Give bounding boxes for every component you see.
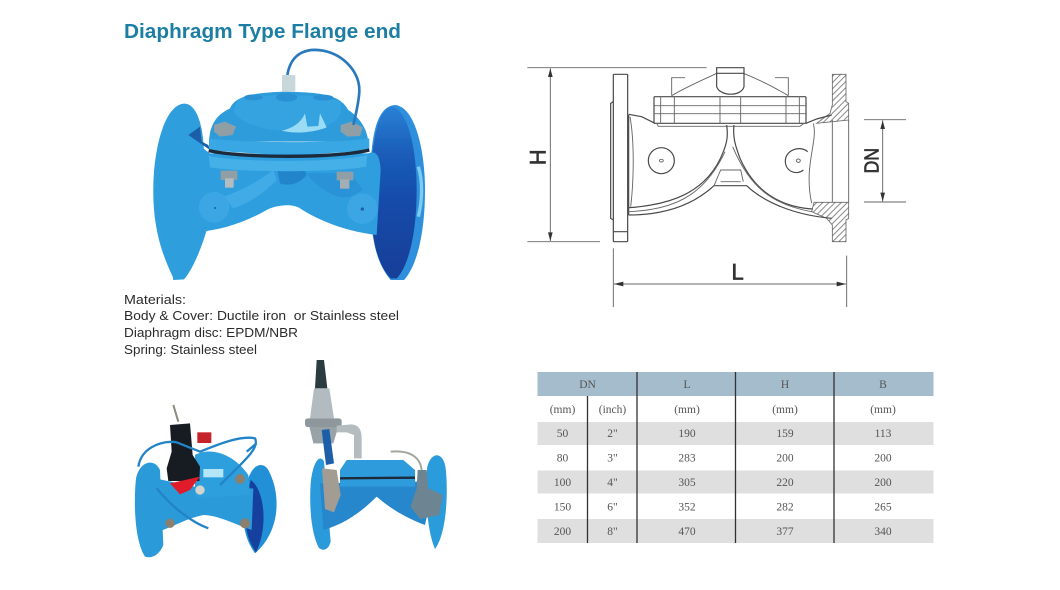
units row (550, 404, 896, 416)
left flange (153, 104, 207, 280)
row DN 80: 200 (874, 452, 892, 464)
table column rules (588, 372, 834, 543)
title: Diaphragm Type Flange end (124, 20, 401, 43)
dimension H: H (525, 149, 550, 165)
row DN 100 (554, 477, 892, 489)
right flange (370, 105, 425, 280)
materials text: Spring: Stainless steel (124, 343, 257, 357)
row DN 50: 190 (678, 428, 696, 440)
row DN 80 (557, 452, 892, 464)
body outline (629, 114, 832, 218)
row DN 80: 80 (557, 452, 568, 464)
bonnet (654, 68, 806, 126)
left flange (611, 74, 629, 242)
dimension L: L (732, 260, 744, 285)
dimension L (613, 248, 847, 307)
table header text: B (879, 379, 887, 391)
units row: (mm) (772, 404, 798, 416)
table header text (579, 379, 887, 391)
row DN 200: 377 (776, 526, 794, 538)
row DN 150: 150 (554, 502, 571, 514)
tube fitting (282, 75, 295, 92)
materials text (124, 293, 399, 357)
row DN 50 (557, 428, 892, 440)
plugs (199, 192, 378, 224)
row DN 200: 340 (874, 526, 892, 538)
table row stripes (538, 422, 934, 543)
materials text: Diaphragm disc: EPDM/NBR (124, 326, 298, 340)
plugs (648, 148, 808, 174)
row DN 50: 159 (776, 428, 794, 440)
row DN 80: 200 (776, 452, 794, 464)
row DN 80: 283 (678, 452, 696, 464)
row DN 150: 352 (678, 502, 696, 514)
dimension DN (861, 120, 906, 202)
table header band (538, 372, 934, 396)
row DN 150: 265 (874, 502, 892, 514)
materials text: Materials: (124, 293, 186, 307)
row DN 200: 470 (678, 526, 696, 538)
valve with black pilot (135, 405, 277, 557)
units row: (mm) (550, 404, 575, 416)
bonnet flange, gasket and lower plate (209, 138, 369, 171)
row DN 100: 4" (607, 477, 618, 489)
row DN 200: 200 (554, 526, 571, 538)
table header text: H (781, 379, 789, 391)
units row: (mm) (674, 404, 700, 416)
bolts (214, 122, 363, 189)
row DN 150: 282 (776, 502, 794, 514)
row DN 150 (554, 502, 892, 514)
row DN 150: 6" (607, 502, 618, 514)
row DN 50: 113 (875, 428, 892, 440)
row DN 50: 2" (607, 428, 618, 440)
dimension H (525, 68, 707, 242)
bonnet dome (209, 92, 368, 142)
sensing tube (287, 50, 359, 125)
dimensions table (538, 372, 934, 543)
row DN 80: 3" (607, 452, 618, 464)
row DN 100: 100 (554, 477, 571, 489)
row DN 200 (554, 526, 892, 538)
row DN 100: 305 (678, 477, 696, 489)
units row: (mm) (870, 404, 896, 416)
right flange section (812, 74, 849, 242)
row DN 50: 50 (557, 428, 568, 440)
valve body (187, 135, 381, 235)
technical drawing (525, 68, 906, 307)
row DN 200: 8" (607, 526, 618, 538)
table header text: L (683, 379, 691, 391)
units row: (inch) (599, 404, 626, 416)
valve with silver pilot (305, 360, 447, 550)
main valve photo (153, 50, 425, 280)
table header text: DN (579, 379, 596, 391)
row DN 100: 220 (776, 477, 794, 489)
materials text: Body & Cover: Ductile iron or Stainless steel (124, 309, 399, 323)
row DN 100: 200 (874, 477, 892, 489)
dimension DN: DN (861, 148, 884, 173)
